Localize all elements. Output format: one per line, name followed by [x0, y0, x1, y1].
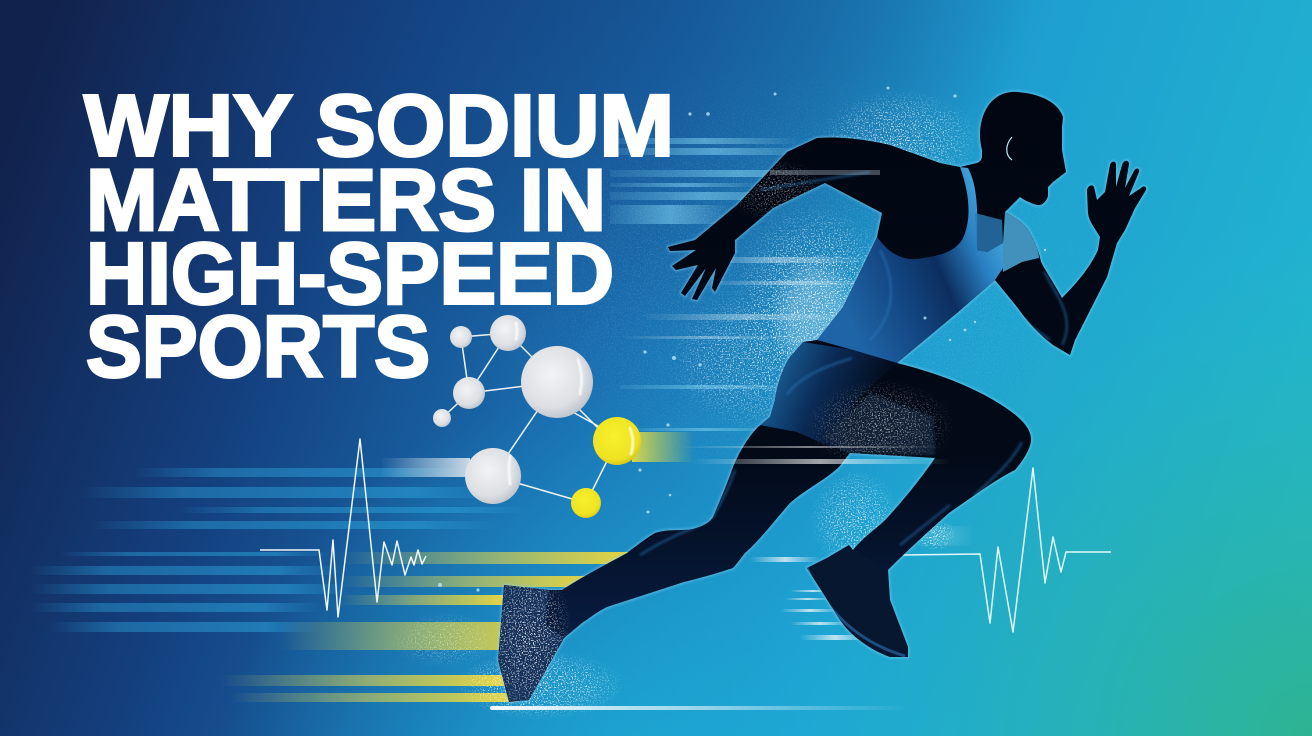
title line 1: WHY SODIUM — [84, 78, 674, 174]
molecule diagram — [380, 315, 694, 518]
interior shading clipped to the body — [498, 92, 1124, 702]
yellow speed streaks — [220, 552, 630, 702]
heartbeat line, left — [260, 439, 426, 617]
title line 3: HIGH-SPEED — [86, 226, 614, 322]
lit shoulder — [1003, 212, 1039, 272]
athletic vest — [817, 167, 1003, 363]
molecule motion trails — [380, 432, 694, 477]
runner rim light — [498, 92, 1146, 702]
streaks crossing the thigh — [680, 170, 950, 464]
soft glow behind torso — [780, 265, 967, 544]
heartbeat line, right — [902, 468, 1111, 632]
runner body — [498, 92, 1146, 702]
title line 2: MATTERS IN — [86, 152, 606, 249]
atoms — [433, 315, 641, 518]
runner silhouette — [496, 90, 1148, 704]
shorts — [760, 342, 897, 453]
short light streaks behind front shoe — [750, 557, 870, 640]
speckled thigh panel — [823, 393, 935, 455]
ear highlight — [1007, 137, 1012, 160]
limb highlights — [640, 172, 1067, 555]
particle spray — [396, 90, 1065, 719]
blue speed streaks, lower left — [30, 468, 528, 632]
title line 4: SPORTS — [86, 298, 430, 396]
neck opening — [975, 213, 1003, 252]
ground line — [490, 706, 910, 710]
front shoe — [807, 545, 908, 657]
light speed streaks, upper centre — [610, 138, 880, 431]
title — [84, 78, 674, 396]
rear shoe — [498, 585, 564, 702]
particles on thigh, arm and rear shoe — [498, 160, 952, 702]
scattered droplets — [438, 86, 1046, 592]
molecule bonds — [442, 333, 617, 503]
